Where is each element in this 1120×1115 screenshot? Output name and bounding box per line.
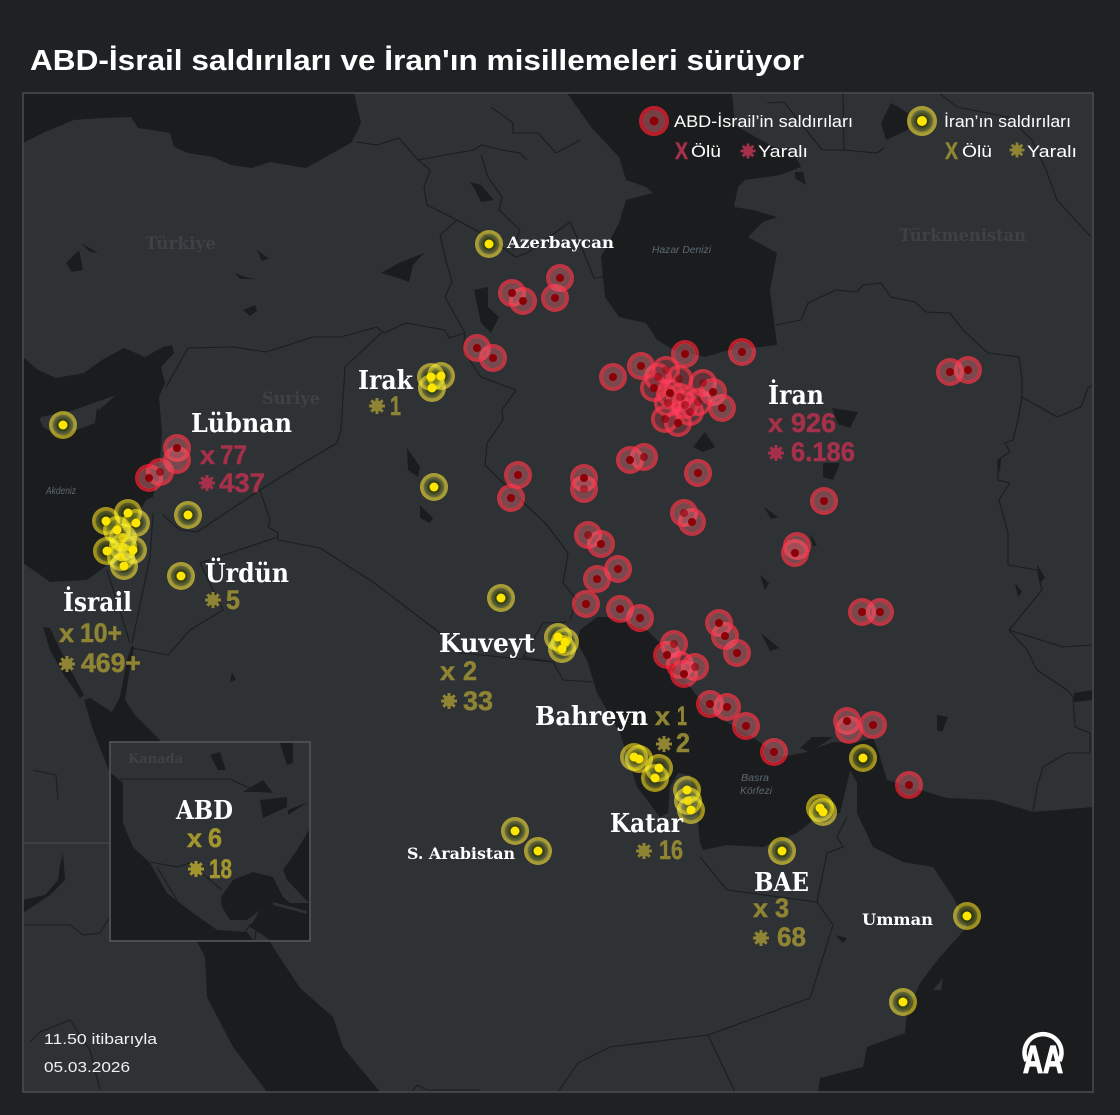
sea: Mediterranean bbox=[23, 345, 174, 582]
country: Irak: 1 bbox=[390, 391, 401, 421]
country: ABD bbox=[175, 796, 233, 884]
country: Kuveyt: 33 bbox=[463, 686, 493, 716]
legend marker: US-Israel bbox=[639, 106, 669, 136]
legend marker: Iran bbox=[907, 106, 937, 136]
country: İran: 6.186 bbox=[791, 437, 855, 467]
sea: Black Sea bbox=[23, 93, 361, 168]
country: İran: İran bbox=[768, 379, 824, 411]
legend: wounded olive bbox=[1010, 142, 1077, 161]
country: ABD: x bbox=[187, 823, 203, 853]
country: İsrail: 10+ bbox=[80, 618, 122, 648]
legend: killed red bbox=[675, 138, 721, 165]
logo: AA: AA bbox=[1023, 1039, 1063, 1082]
country: Lübnan: Lübnan bbox=[191, 409, 292, 439]
faint country labels: Suriye bbox=[262, 389, 320, 409]
land: Masirah bbox=[933, 978, 943, 990]
legend: killed olive: X bbox=[945, 138, 958, 165]
country: ABD: ABD bbox=[175, 796, 233, 826]
country: İran bbox=[768, 379, 855, 467]
logo: AA bbox=[1023, 1034, 1063, 1082]
country: Kuveyt: 2 bbox=[463, 656, 477, 686]
date note: 05.03.2026 bbox=[44, 1059, 130, 1076]
country: BAE: 3 bbox=[775, 893, 789, 923]
country: Ürdün: 5 bbox=[226, 585, 240, 615]
markers: Iran strike rings bbox=[49, 230, 981, 1016]
country: İsrail: İsrail bbox=[63, 586, 132, 618]
country: İsrail bbox=[59, 586, 141, 678]
country: İsrail: 469+ bbox=[81, 648, 141, 678]
lakes and rivers bbox=[23, 103, 1093, 943]
country: ABD: 6 bbox=[208, 823, 222, 853]
country: Kuveyt: Kuveyt bbox=[439, 629, 535, 659]
country: Bahreyn bbox=[535, 701, 690, 758]
country: Bahreyn: 2 bbox=[676, 728, 690, 758]
markers: dark halos under Iran strikes bbox=[53, 234, 977, 1012]
markers: Iran strike centres bbox=[58, 240, 972, 1006]
legend: killed red: X bbox=[675, 138, 688, 165]
country: Ürdün: Ürdün bbox=[205, 557, 289, 589]
faint country labels bbox=[145, 226, 1026, 409]
title: ABD-İsrail saldırıları ve İran'ın misillemeleri sürüyor bbox=[30, 45, 804, 77]
country: Bahreyn: x bbox=[655, 701, 671, 731]
legend: killed olive: Ölü bbox=[962, 142, 992, 161]
country: BAE: 68 bbox=[777, 922, 806, 952]
inset label: Kanada: Kanada bbox=[128, 752, 184, 767]
sea labels bbox=[45, 245, 773, 797]
date note: 11.50 itibarıyla bbox=[44, 1031, 158, 1048]
label: Azerbaycan: Azerbaycan bbox=[506, 233, 614, 252]
country: Bahreyn: Bahreyn bbox=[535, 702, 648, 732]
country: Lübnan bbox=[191, 409, 292, 498]
country: İran: x bbox=[768, 408, 784, 438]
country: Lübnan: x bbox=[200, 440, 216, 470]
label: Umman: Umman bbox=[862, 910, 933, 929]
faint country labels: Türkmenistan bbox=[899, 226, 1026, 246]
sea labels: Akdeniz bbox=[45, 486, 76, 497]
sea labels: Basra bbox=[741, 773, 769, 784]
legend: wounded red: Yaralı bbox=[758, 142, 808, 161]
legend: killed red: Ölü bbox=[691, 142, 721, 161]
legend bbox=[639, 106, 1077, 165]
country: ABD: 18 bbox=[209, 854, 232, 884]
land: Cyprus bbox=[40, 395, 116, 437]
country: Katar: Katar bbox=[610, 809, 683, 839]
country: BAE bbox=[753, 868, 809, 952]
label: S. Arabistan: S. Arabistan bbox=[407, 844, 515, 863]
sea labels: Körfezi bbox=[740, 786, 773, 797]
country: Kuveyt: x bbox=[440, 656, 456, 686]
country: Kuveyt bbox=[439, 629, 535, 716]
legend: wounded olive: Yaralı bbox=[1027, 142, 1077, 161]
country: BAE: BAE bbox=[754, 868, 809, 898]
country: Katar: 16 bbox=[659, 835, 683, 865]
country: Irak: Irak bbox=[358, 366, 414, 396]
sea: Persian Gulf and Arabian Sea bbox=[577, 617, 1093, 1092]
markers: grey wash under US-Israel strikes bbox=[138, 268, 978, 796]
date note bbox=[44, 1031, 158, 1076]
legend: killed olive bbox=[945, 138, 992, 165]
markers: US-Israel strike rings bbox=[135, 264, 982, 799]
country: Katar bbox=[610, 809, 683, 865]
inset map: ABD bbox=[110, 742, 310, 941]
country: İran: 926 bbox=[791, 408, 836, 438]
legend text: US-Israel strikes: ABD-İsrail’in saldırıları bbox=[674, 112, 853, 131]
country: Irak bbox=[358, 366, 414, 421]
sea: Caspian bbox=[567, 93, 801, 357]
country: Lübnan: 77 bbox=[220, 440, 247, 470]
faint country labels: Türkiye bbox=[145, 234, 216, 254]
markers: US-Israel strike centres bbox=[145, 274, 972, 789]
country: Bahreyn: 1 bbox=[677, 701, 687, 731]
legend: wounded red bbox=[740, 142, 808, 161]
country: İsrail: x bbox=[59, 618, 75, 648]
legend text: Iran strikes: İran’ın saldırıları bbox=[944, 112, 1071, 131]
sea: Red Sea bbox=[84, 645, 380, 1092]
sea labels: Hazar Denizi bbox=[652, 245, 712, 256]
country: Lübnan: 437 bbox=[219, 468, 265, 498]
country: Ürdün bbox=[205, 557, 289, 615]
country: BAE: x bbox=[753, 893, 769, 923]
